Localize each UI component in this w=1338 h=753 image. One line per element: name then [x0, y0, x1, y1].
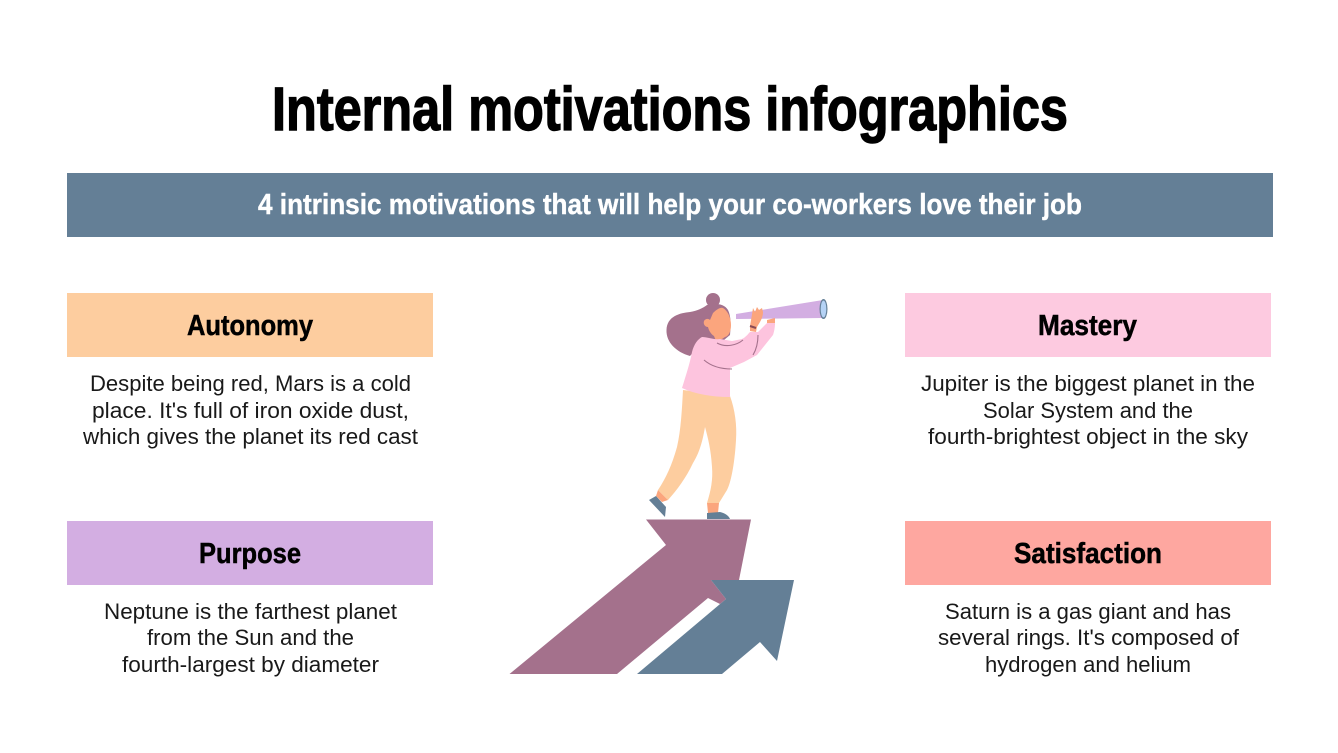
- text: satisfaction description: [938, 599, 1240, 677]
- illustration: arrows: [510, 520, 794, 674]
- text: autonomy description: place. It's full of iron oxide dust,: [92, 398, 409, 423]
- heading: mastery: [905, 293, 1271, 357]
- text: purpose description: from the Sun and the: [147, 625, 354, 650]
- back hand: [767, 318, 775, 326]
- text: mastery description: Solar System and the: [983, 398, 1193, 423]
- ankles: [656, 490, 719, 513]
- hair: [666, 304, 731, 356]
- heading: satisfaction: Satisfaction: [1014, 538, 1162, 570]
- wristband: [750, 326, 756, 328]
- subtitle banner: 4 intrinsic motivations that will help your co-workers love their job: [258, 189, 1082, 221]
- text: satisfaction description: several rings. It's composed of: [938, 625, 1240, 650]
- text: satisfaction description: hydrogen and helium: [985, 652, 1191, 677]
- shoes: [649, 496, 730, 519]
- telescope: [736, 299, 828, 319]
- text: autonomy description: Despite being red, Mars is a cold: [90, 371, 411, 396]
- heading: purpose: Purpose: [199, 538, 301, 570]
- hair bun: [706, 293, 720, 307]
- text: mastery description: fourth-brightest object in the sky: [928, 424, 1249, 449]
- text: mastery description: Jupiter is the biggest planet in the: [921, 371, 1255, 396]
- text: purpose description: fourth-largest by diameter: [122, 652, 379, 677]
- heading: satisfaction: [905, 521, 1271, 585]
- illustration: woman with telescope: [649, 293, 828, 519]
- subtitle banner: [67, 173, 1273, 237]
- text: purpose description: Neptune is the farthest planet: [104, 599, 398, 624]
- heading: mastery: Mastery: [1038, 310, 1137, 342]
- panel: purpose: [67, 521, 433, 677]
- heading: autonomy: [67, 293, 433, 357]
- panel: mastery: [905, 293, 1271, 449]
- sweater: [682, 323, 775, 397]
- text: satisfaction description: Saturn is a gas giant and has: [945, 599, 1231, 624]
- panel: satisfaction: [905, 521, 1271, 677]
- title: Internal motivations infographics: [272, 75, 1068, 143]
- heading: purpose: [67, 521, 433, 585]
- text: autonomy description: [82, 371, 419, 449]
- sweater folds: [704, 335, 758, 369]
- front hand: [750, 307, 763, 332]
- heading: autonomy: Autonomy: [187, 310, 313, 342]
- arrow: mauve: [510, 520, 751, 674]
- text: autonomy description: which gives the planet its red cast: [82, 424, 419, 449]
- arrow: blue: [637, 580, 794, 674]
- panel: autonomy: [67, 293, 433, 449]
- trousers: [658, 390, 736, 503]
- face: [704, 308, 731, 341]
- text: purpose description: [104, 599, 398, 677]
- text: mastery description: [921, 371, 1255, 449]
